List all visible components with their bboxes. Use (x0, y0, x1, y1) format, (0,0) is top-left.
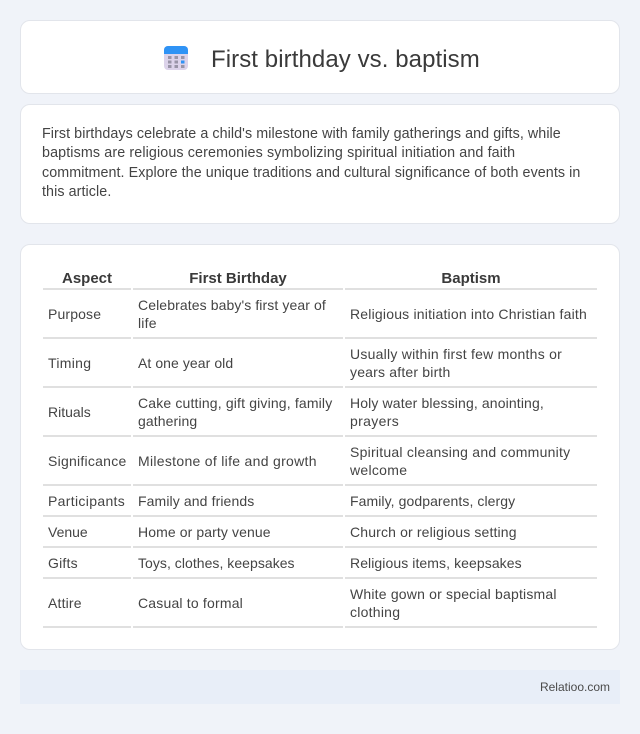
intro text: baptisms are religious ceremonies symbolizing spiritual initiation and faith (42, 145, 515, 161)
row: venue: Venue (48, 524, 88, 540)
row: purpose: Celebrates baby's first year of (138, 297, 326, 313)
table header (62, 270, 501, 287)
row: participants: Family, godparents, clergy (350, 493, 515, 509)
icon: calendar (164, 46, 188, 70)
row: venue: Church or religious setting (350, 524, 517, 540)
panel: comparison table (20, 244, 620, 650)
panel: title header (20, 20, 620, 94)
row: significance: Spiritual cleansing and community (350, 444, 570, 460)
row: rituals: gathering (138, 413, 197, 429)
footer bar (20, 670, 620, 704)
row: rituals: Holy water blessing, anointing, (350, 395, 544, 411)
row: timing: Timing (48, 355, 91, 371)
row: attire: White gown or special baptismal (350, 586, 557, 602)
row: gifts: Gifts (48, 555, 78, 571)
row: significance: Significance (48, 453, 126, 469)
row: attire (48, 586, 557, 620)
row: purpose: life (138, 315, 157, 331)
row: attire: Attire (48, 595, 82, 611)
intro text: this article. (42, 184, 111, 200)
row: participants (48, 493, 516, 509)
row: attire: clothing (350, 604, 400, 620)
row: rituals: Cake cutting, gift giving, family (138, 395, 332, 411)
table header: First Birthday (189, 270, 287, 287)
row: participants: Family and friends (138, 493, 254, 509)
row: purpose: Religious initiation into Christian faith (350, 306, 587, 322)
row: timing (48, 346, 562, 380)
row: venue (48, 524, 517, 540)
row: gifts (48, 555, 522, 571)
row: timing: Usually within first few months or (350, 346, 562, 362)
row: rituals (48, 395, 544, 429)
row: venue: Home or party venue (138, 524, 271, 540)
row: timing: years after birth (350, 364, 450, 380)
row: significance: Milestone of life and growth (138, 453, 317, 469)
panel: introduction (20, 104, 620, 224)
row: gifts: Toys, clothes, keepsakes (138, 555, 295, 571)
row: participants: Participants (48, 493, 125, 509)
row: purpose (48, 297, 587, 331)
row: timing: At one year old (138, 355, 233, 371)
title: First birthday vs. baptism (211, 46, 480, 73)
row: significance: welcome (350, 462, 407, 478)
row: significance (48, 444, 570, 478)
footer brand: Relatioo.com (540, 680, 610, 694)
intro text: commitment. Explore the unique traditions and cultural significance of both events in (42, 165, 580, 181)
comparison table (43, 270, 597, 628)
row: purpose: Purpose (48, 306, 101, 322)
intro text: First birthdays celebrate a child's milestone with family gatherings and gifts, while (42, 126, 561, 142)
row: attire: Casual to formal (138, 595, 243, 611)
row: rituals: Rituals (48, 404, 91, 420)
table header: Baptism (441, 270, 501, 287)
table header: Aspect (62, 270, 112, 287)
intro text (42, 126, 580, 200)
row: rituals: prayers (350, 413, 399, 429)
row: gifts: Religious items, keepsakes (350, 555, 522, 571)
